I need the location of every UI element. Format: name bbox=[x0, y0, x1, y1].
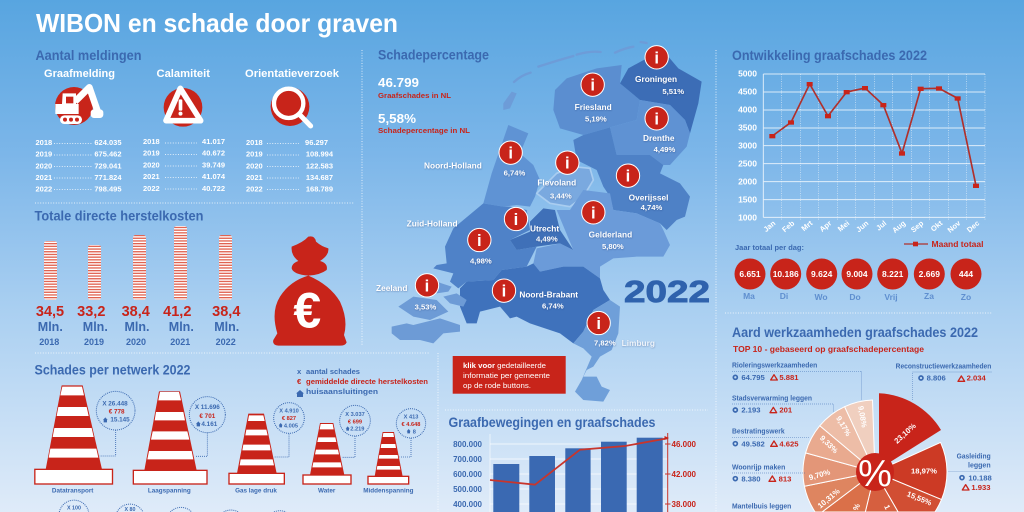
stat: graafschades: 46.799 bbox=[378, 75, 419, 90]
pie labels and callouts: Bestratingswerk bbox=[732, 427, 785, 436]
table: calamiteit: 2022 bbox=[143, 184, 160, 193]
map: limburg bbox=[573, 300, 620, 402]
map labels: 3,44% bbox=[550, 191, 572, 200]
map: utrecht bbox=[510, 208, 573, 250]
table: calamiteit: 39.749 bbox=[202, 160, 225, 169]
info button letters: i bbox=[591, 203, 596, 222]
table: graafmelding: 729.041 bbox=[94, 161, 122, 170]
pie labels and callouts: 49.582 bbox=[741, 439, 765, 448]
day circles: Za bbox=[924, 291, 934, 301]
icon: money bag: € bbox=[293, 283, 321, 339]
bar chart: 46.000 bbox=[672, 440, 697, 449]
map labels: Drenthe bbox=[643, 133, 675, 143]
heading: herstelkosten: Totale directe herstelkosten bbox=[34, 208, 204, 224]
icon: money bag bbox=[273, 236, 347, 346]
map labels: Flevoland bbox=[537, 178, 576, 188]
cone: middenspanning bbox=[363, 409, 426, 495]
map labels: Noord-Holland bbox=[424, 161, 482, 171]
table: orientatieverzoek: 2020 bbox=[246, 161, 263, 170]
table: orientatieverzoek: 96.297 bbox=[305, 138, 328, 147]
table: graafmelding: 624.035 bbox=[94, 138, 122, 147]
values per year: Mln. bbox=[169, 320, 194, 334]
day circles bbox=[734, 258, 982, 302]
pie labels and callouts: 8.380 bbox=[741, 474, 761, 483]
map labels: Overijssel bbox=[629, 192, 668, 202]
info button letters: i bbox=[508, 144, 513, 163]
bar chart: 38.000 bbox=[672, 500, 697, 509]
info button letters: i bbox=[596, 314, 601, 333]
map labels: Limburg bbox=[622, 338, 655, 348]
panel: schadepercentage bbox=[376, 42, 710, 402]
info buttons bbox=[415, 46, 668, 335]
table: orientatieverzoek: 122.583 bbox=[306, 161, 333, 170]
icon: excavator bbox=[55, 87, 103, 125]
info button letters: i bbox=[565, 154, 570, 173]
values per year bbox=[36, 304, 240, 347]
line chart bbox=[763, 74, 985, 220]
cone: laagspanning: € 701 bbox=[199, 413, 216, 420]
day circles: 9.624 bbox=[811, 269, 833, 279]
bar chart: 42.000 bbox=[672, 470, 697, 479]
cone: datatransport: 15.145 bbox=[110, 417, 130, 424]
cone: gas lage druk: 4.005 bbox=[284, 423, 298, 429]
pie labels and callouts: 23,10% bbox=[892, 421, 918, 445]
table: orientatieverzoek: 134.687 bbox=[306, 173, 333, 182]
chart y-axis: 1500 bbox=[738, 194, 757, 204]
legend: aantal schades bbox=[306, 367, 360, 376]
values per year: 38,4 bbox=[212, 304, 240, 320]
map: overijssel bbox=[573, 127, 690, 230]
pie labels and callouts: 9,33% bbox=[818, 434, 840, 455]
info button letters: i bbox=[590, 76, 595, 95]
chart y-axis: 1000 bbox=[738, 212, 757, 222]
table: orientatieverzoek: 2018 bbox=[246, 138, 263, 147]
values per year: 33,2 bbox=[77, 304, 105, 320]
chart legend bbox=[904, 240, 984, 249]
table: graafmelding: 771.824 bbox=[94, 173, 122, 182]
chart x-axis months: Jun bbox=[854, 218, 871, 234]
column heading: calamiteit: Calamiteit bbox=[156, 68, 210, 80]
pie labels and callouts: 1 bbox=[882, 503, 892, 512]
day circles: 10.186 bbox=[773, 269, 799, 279]
pie labels and callouts: Woonrijp maken bbox=[732, 462, 786, 471]
table: orientatieverzoek: 168.789 bbox=[306, 185, 333, 194]
panel: schades per netwerk bbox=[34, 361, 428, 512]
map labels: 4,49% bbox=[536, 235, 558, 244]
cone: gas lage druk: € 827 bbox=[282, 416, 296, 422]
callout: klik voor: informatie per gemeente bbox=[463, 371, 550, 380]
pie labels and callouts: leggen bbox=[968, 461, 991, 470]
panel: aantal meldingen bbox=[36, 47, 340, 194]
legend: € bbox=[297, 377, 302, 386]
day circles: 6.651 bbox=[739, 269, 761, 279]
pie labels and callouts: Rioleringswerkzaamheden bbox=[732, 361, 818, 370]
map labels: 4,49% bbox=[654, 145, 676, 154]
icon: warning triangle bbox=[164, 88, 202, 127]
pie labels and callouts: 9,08% bbox=[856, 405, 869, 428]
coin stacks bbox=[44, 226, 232, 300]
map labels: Zuid-Holland bbox=[407, 219, 458, 229]
values per year: 2020 bbox=[126, 337, 146, 347]
day circles: Di bbox=[780, 291, 788, 301]
subheading: top 10: TOP 10 - gebaseerd op graafschadepercentage bbox=[733, 344, 924, 354]
chart x-axis months: Nov bbox=[946, 218, 963, 235]
pie labels and callouts: 15,55% bbox=[906, 489, 933, 508]
icon: magnifier bbox=[271, 87, 311, 126]
values per year: 2022 bbox=[216, 337, 236, 347]
day circles: Do bbox=[849, 292, 861, 302]
day circles: Zo bbox=[961, 292, 971, 302]
values per year: 2019 bbox=[84, 337, 104, 347]
pie labels and callouts: 813 bbox=[779, 474, 791, 483]
pie labels and callouts: 8.806 bbox=[927, 374, 946, 383]
table: calamiteit: 2019 bbox=[143, 149, 160, 158]
pie labels and callouts: 2.034 bbox=[967, 374, 987, 383]
label: jaar totaal per dag: Jaar totaal per dag: bbox=[735, 243, 804, 252]
info button letters: i bbox=[425, 276, 429, 295]
chart x-axis months: Aug bbox=[890, 218, 908, 235]
chart y-axis bbox=[738, 68, 757, 222]
info button letters: i bbox=[654, 109, 659, 128]
chart x-axis months: Feb bbox=[780, 218, 797, 234]
values per year: 38,4 bbox=[122, 304, 150, 320]
map labels: 5,51% bbox=[662, 87, 684, 96]
pie labels and callouts: 9,17% bbox=[834, 414, 853, 438]
cone: gas lage druk bbox=[229, 403, 304, 495]
values per year: 2018 bbox=[39, 337, 59, 347]
map: gelderland bbox=[533, 190, 670, 278]
pie labels and callouts bbox=[732, 361, 992, 512]
map labels: Zeeland bbox=[376, 283, 407, 293]
stat: graafschades bbox=[378, 75, 451, 100]
callout: klik voor bbox=[453, 356, 566, 394]
table: calamiteit bbox=[143, 137, 226, 193]
legend bbox=[296, 367, 428, 397]
day circles: Vrij bbox=[884, 292, 898, 302]
chart y-axis: 4000 bbox=[738, 104, 757, 114]
pie labels and callouts: 9,70% bbox=[808, 467, 831, 482]
legend: gemiddelde directe herstelkosten bbox=[306, 377, 428, 386]
heading: ontwikkeling: Ontwikkeling graafschades 2022 bbox=[732, 47, 927, 63]
table: graafmelding: 2018 bbox=[36, 138, 52, 147]
day circles: 9.004 bbox=[846, 269, 868, 279]
column heading: orientatieverzoek: Orientatieverzoek bbox=[245, 68, 340, 80]
cone: water: X 3.037 bbox=[345, 412, 365, 418]
year label 2022: 2022 bbox=[624, 274, 710, 309]
info button letters: i bbox=[514, 210, 518, 229]
table: calamiteit: 41.074 bbox=[202, 172, 226, 181]
pie labels and callouts: 10.188 bbox=[968, 473, 992, 482]
table: calamiteit: 40.672 bbox=[202, 149, 225, 158]
info button letters: i bbox=[626, 167, 630, 186]
stat: schadepercentage bbox=[378, 111, 470, 135]
stat: schadepercentage: Schadepercentage in NL bbox=[378, 126, 470, 135]
map labels: 4,74% bbox=[641, 203, 663, 212]
values per year: 2021 bbox=[170, 337, 190, 347]
pie labels and callouts: % bbox=[851, 502, 862, 512]
cone: datatransport: Datatransport bbox=[52, 488, 94, 495]
map: friesland bbox=[553, 65, 640, 135]
table: orientatieverzoek: 2021 bbox=[246, 173, 263, 182]
bar chart: 700.000 bbox=[453, 455, 483, 464]
cone: datatransport bbox=[35, 385, 135, 495]
map of the Netherlands bbox=[376, 42, 702, 402]
map labels: Groningen bbox=[635, 74, 677, 84]
info button letters: i bbox=[502, 282, 506, 301]
day circles: 2.669 bbox=[919, 269, 940, 279]
day circles: 8.221 bbox=[882, 269, 904, 279]
bar chart bbox=[453, 433, 697, 512]
map: noord-holland bbox=[483, 125, 540, 207]
pie labels and callouts: Mantelbuis leggen bbox=[732, 501, 792, 510]
table: calamiteit: 2018 bbox=[143, 137, 160, 146]
map labels: Gelderland bbox=[589, 229, 632, 239]
panel: graafbewegingen en graafschades bbox=[448, 414, 697, 512]
map labels: 5,19% bbox=[585, 114, 607, 123]
chart x-axis months bbox=[762, 218, 981, 235]
chart x-axis months: Jul bbox=[874, 219, 888, 233]
values per year: Mln. bbox=[83, 320, 108, 334]
map: zuid-holland bbox=[433, 203, 537, 288]
callout: klik voor: op de rode buttons. bbox=[463, 381, 531, 390]
map: noord-brabant bbox=[460, 263, 610, 343]
table: graafmelding: 675.462 bbox=[94, 150, 122, 159]
cone: middenspanning: 8 bbox=[413, 429, 416, 435]
day circles: 444 bbox=[959, 269, 973, 279]
cone: water bbox=[303, 405, 370, 495]
cone: gas lage druk: X 4.910 bbox=[279, 409, 299, 415]
panel: ontwikkeling graafschades bbox=[732, 47, 985, 302]
chart x-axis months: Okt bbox=[929, 218, 945, 234]
cone: water: 2.219 bbox=[350, 427, 364, 433]
cone: datatransport: X 26.448 bbox=[102, 400, 128, 407]
pie labels and callouts: 2.193 bbox=[741, 406, 761, 415]
table: graafmelding: 2022 bbox=[36, 185, 52, 194]
cone: middenspanning: Middenspanning bbox=[363, 488, 414, 495]
table: graafmelding: 2019 bbox=[36, 150, 52, 159]
table: orientatieverzoek: 2019 bbox=[246, 150, 263, 159]
pie centre symbol: % bbox=[858, 453, 892, 495]
pie labels and callouts: Stadsverwarming leggen bbox=[732, 393, 812, 402]
values per year: 34,5 bbox=[36, 304, 64, 320]
cone: laagspanning bbox=[133, 391, 225, 495]
map labels: Utrecht bbox=[530, 224, 559, 234]
map labels: 3,53% bbox=[415, 303, 437, 312]
column heading: graafmelding: Graafmelding bbox=[44, 68, 115, 80]
title: WIBON en schade door graven bbox=[36, 8, 398, 38]
cone: middenspanning: X 413 bbox=[404, 415, 418, 421]
legend: x bbox=[297, 367, 302, 376]
chart legend: Maand totaal bbox=[932, 240, 984, 249]
pie labels and callouts: Reconstructiewerkzaamheden bbox=[896, 361, 992, 370]
map: groningen bbox=[620, 57, 702, 133]
values per year: Mln. bbox=[38, 320, 63, 334]
map labels: 5,80% bbox=[602, 242, 624, 251]
heading: schades per netwerk: Schades per netwerk 2022 bbox=[34, 361, 191, 377]
map labels: Friesland bbox=[575, 102, 612, 112]
map labels: 4,98% bbox=[470, 257, 492, 266]
panel: aard werkzaamheden bbox=[732, 324, 992, 512]
map: flevoland bbox=[537, 167, 593, 207]
chart x-axis months: Jan bbox=[762, 218, 778, 234]
heading: aantal meldingen: Aantal meldingen bbox=[36, 47, 142, 63]
table: graafmelding: 2021 bbox=[36, 173, 52, 182]
heading: schadepercentage: Schadepercentage bbox=[378, 46, 489, 62]
map labels bbox=[376, 74, 684, 348]
map labels: 6,74% bbox=[504, 169, 526, 178]
table: orientatieverzoek: 108.994 bbox=[306, 150, 334, 159]
stat: schadepercentage: 5,58% bbox=[378, 111, 416, 126]
cone: middenspanning: € 4.648 bbox=[402, 422, 420, 428]
table: orientatieverzoek: 2022 bbox=[246, 185, 263, 194]
cone: laagspanning: 4.161 bbox=[201, 421, 218, 428]
pie labels and callouts: Gasleiding bbox=[957, 452, 991, 461]
pie labels and callouts: 4.625 bbox=[779, 439, 799, 448]
cone: gas lage druk: Gas lage druk bbox=[235, 488, 277, 495]
stat: graafschades: Graafschades in NL bbox=[378, 91, 451, 100]
chart y-axis: 3000 bbox=[738, 140, 757, 150]
legend: huisaansluitingen bbox=[306, 387, 378, 396]
chart x-axis months: Mrt bbox=[800, 218, 815, 233]
map: wadden islands bbox=[503, 42, 647, 110]
table: calamiteit: 41.017 bbox=[202, 137, 225, 146]
pie centre bbox=[856, 453, 894, 491]
info button letters: i bbox=[477, 231, 482, 250]
map: drenthe bbox=[610, 100, 690, 165]
bar chart: 800.000 bbox=[453, 440, 483, 449]
chart y-axis: 2500 bbox=[738, 158, 757, 168]
table: graafmelding bbox=[36, 138, 122, 194]
bar chart: 500.000 bbox=[453, 485, 483, 494]
partial bubbles: lower cones: X 100 bbox=[67, 505, 81, 511]
pie labels and callouts: 201 bbox=[779, 406, 793, 415]
pie chart bbox=[803, 393, 947, 512]
table: graafmelding: 2020 bbox=[36, 161, 52, 170]
pie labels and callouts: 10,31% bbox=[816, 487, 842, 510]
bar chart: 400.000 bbox=[453, 500, 483, 509]
day circles: Ma bbox=[743, 291, 755, 301]
panel: totale directe herstelkosten bbox=[34, 208, 347, 347]
callout: klik voor: klik voor gedetailleerde bbox=[463, 361, 546, 370]
chart y-axis: 4500 bbox=[738, 86, 757, 96]
cone: laagspanning: X 11.696 bbox=[195, 404, 220, 411]
pie labels and callouts: 1.933 bbox=[971, 483, 991, 492]
chart x-axis months: Dec bbox=[965, 219, 981, 234]
cone: water: € 699 bbox=[348, 419, 362, 425]
cone: datatransport: € 778 bbox=[109, 409, 125, 416]
pie labels and callouts: 5.881 bbox=[779, 373, 799, 382]
info button letters bbox=[425, 48, 659, 333]
chart x-axis months: Apr bbox=[818, 219, 833, 234]
table: calamiteit: 40.722 bbox=[202, 184, 225, 193]
heading: aard werkzaamheden: Aard werkzaamheden graafschades 2022 bbox=[732, 324, 978, 340]
values per year: Mln. bbox=[124, 320, 150, 334]
map labels: Noord-Brabant bbox=[519, 290, 578, 300]
chart y-axis: 2000 bbox=[738, 176, 757, 186]
pie labels and callouts: 18,97% bbox=[911, 466, 937, 475]
heading: graafbewegingen: Graafbewegingen en graafschades bbox=[448, 414, 656, 430]
cone: laagspanning: Laagspanning bbox=[148, 488, 191, 495]
chart x-axis months: Mei bbox=[836, 219, 851, 234]
map labels: 6,74% bbox=[542, 301, 564, 310]
partial bubbles: lower cones bbox=[59, 500, 286, 512]
info button letters: i bbox=[654, 48, 659, 67]
chart y-axis: 5000 bbox=[738, 68, 757, 78]
pie labels and callouts: 64.795 bbox=[741, 373, 765, 382]
chart x-axis months: Sep bbox=[909, 218, 926, 234]
bar chart: 600.000 bbox=[453, 470, 483, 479]
map: zeeland bbox=[392, 280, 467, 343]
day circles: Wo bbox=[814, 292, 828, 302]
cone: water: Water bbox=[318, 488, 336, 495]
table: calamiteit: 2021 bbox=[143, 172, 160, 181]
map labels: 7,82% bbox=[594, 339, 616, 348]
chart y-axis: 3500 bbox=[738, 122, 757, 132]
table: calamiteit: 2020 bbox=[143, 160, 160, 169]
values per year: 41,2 bbox=[163, 304, 191, 320]
table: graafmelding: 798.495 bbox=[94, 185, 122, 194]
table: orientatieverzoek bbox=[246, 138, 334, 194]
values per year: Mln. bbox=[214, 320, 239, 334]
